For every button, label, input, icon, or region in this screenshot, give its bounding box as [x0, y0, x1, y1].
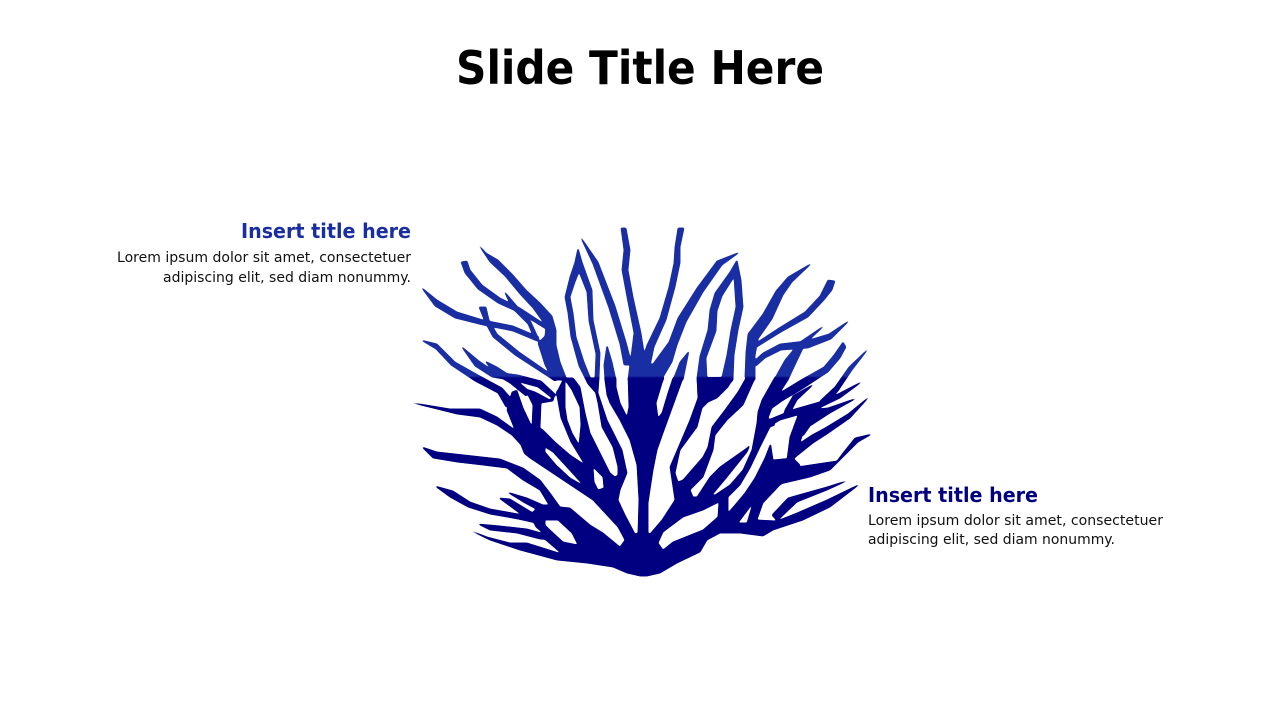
coral: right loop — [697, 260, 743, 402]
body: upper left: adipiscing elit, sed diam nonummy. — [163, 270, 411, 286]
heading: lower right: Insert title here — [868, 483, 1038, 507]
coral illustration — [408, 228, 872, 576]
body: lower right — [868, 513, 1163, 548]
body: lower right: Lorem ipsum dolor sit amet, consectetuer — [868, 513, 1163, 529]
coral: upper left branches — [478, 244, 567, 380]
text block: upper left — [117, 219, 411, 286]
coral: trunk top — [628, 364, 662, 380]
body: lower right: adipiscing elit, sed diam nonummy. — [868, 532, 1115, 548]
heading: upper left: Insert title here — [241, 219, 411, 243]
text block: lower right — [868, 483, 1163, 548]
coral: left lower limbs — [408, 402, 530, 458]
title: Slide Title Here — [456, 41, 824, 95]
body: upper left — [117, 250, 411, 286]
body: upper left: Lorem ipsum dolor sit amet, consectetuer — [117, 250, 411, 266]
coral: upper right branches — [745, 263, 812, 380]
coral: lower body mass — [467, 377, 860, 576]
coral: left loop — [565, 248, 600, 392]
coral: central upper branches and loops — [621, 228, 646, 365]
coral: stripe tips — [604, 345, 616, 380]
